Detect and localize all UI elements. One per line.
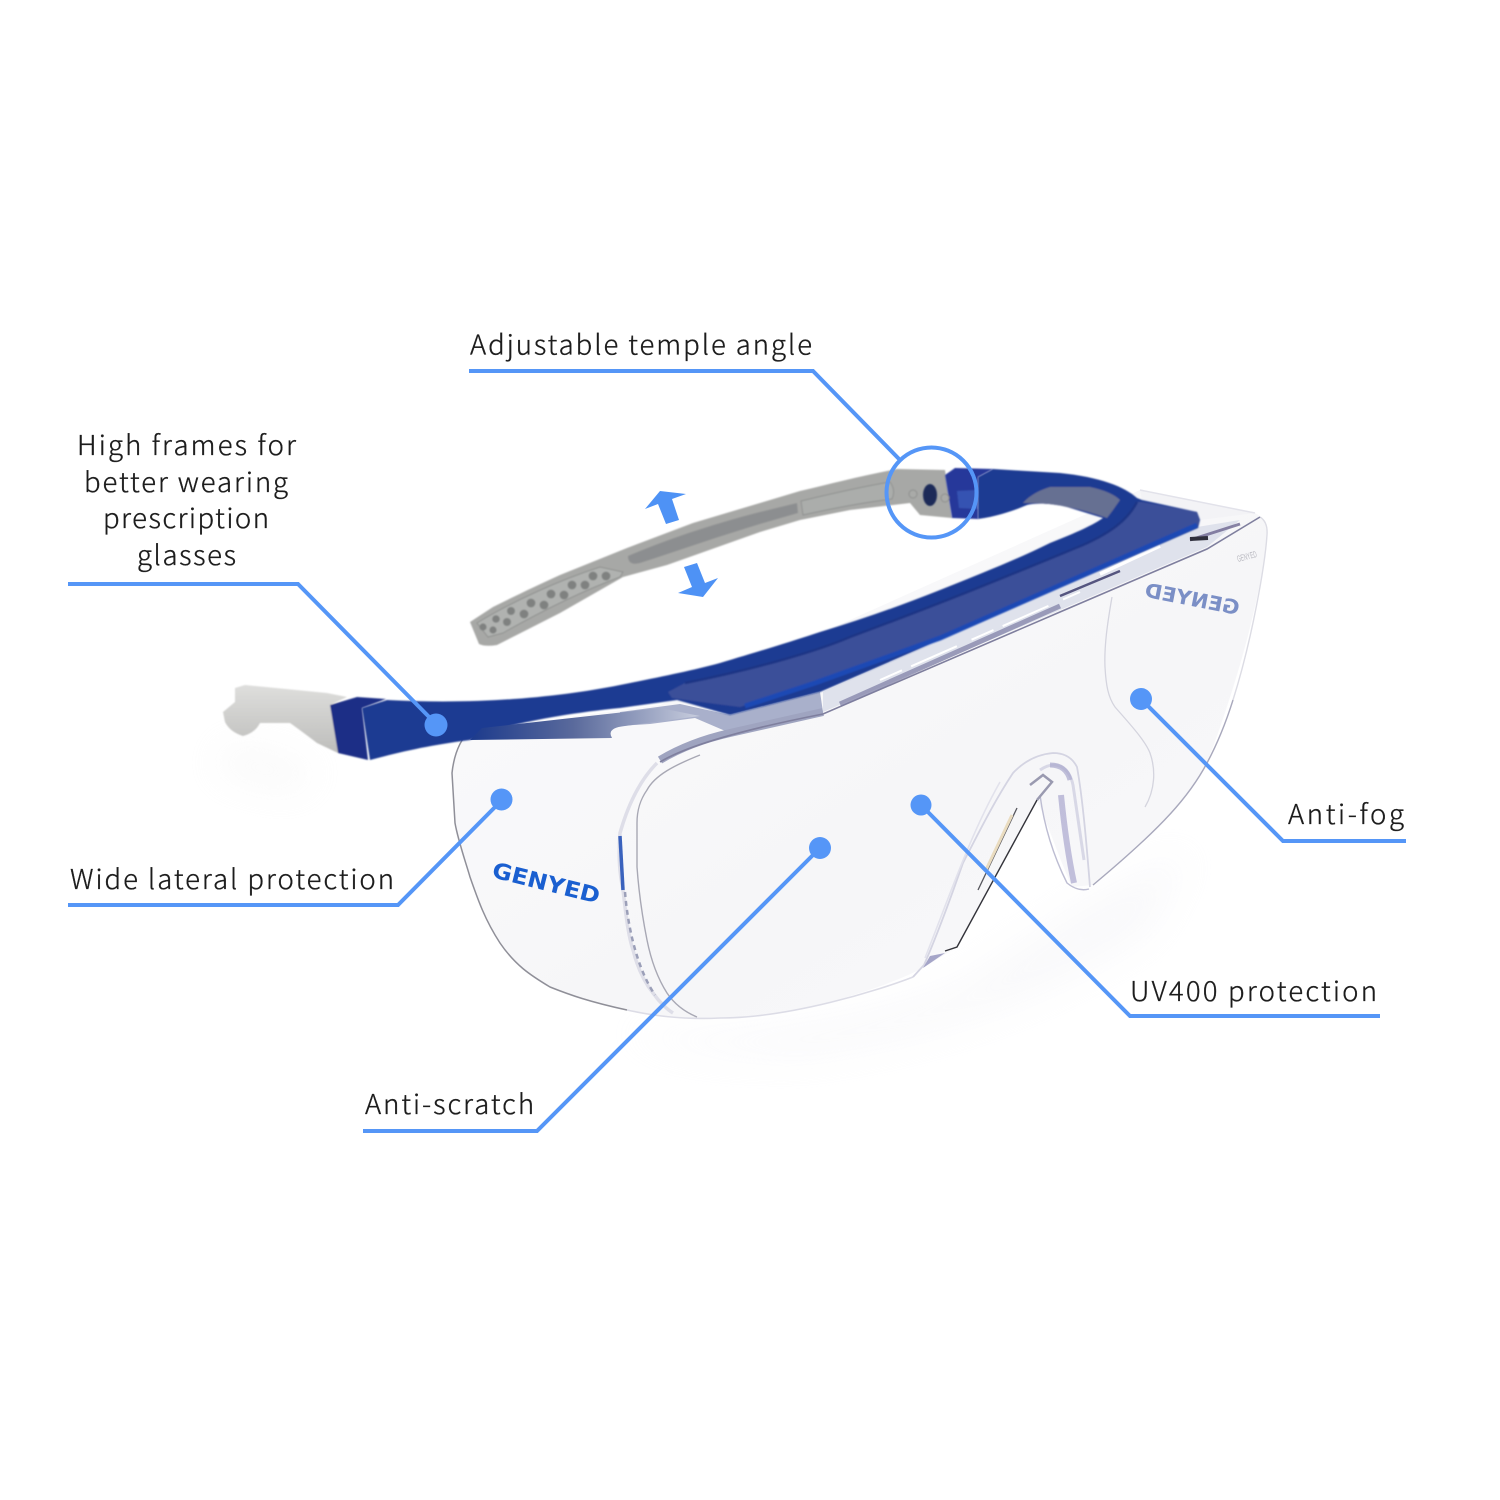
- lens top edge strip: [620, 490, 1260, 762]
- dark frame seen through lens: [470, 708, 700, 740]
- lens body: [452, 490, 1267, 1018]
- small lens marking: GENYED: [1236, 549, 1258, 564]
- callout: high frames: High frames for: [77, 423, 296, 463]
- callout: adjustable temple angle: [469, 322, 976, 538]
- callout: high frames: glasses: [137, 533, 236, 573]
- temple adjust arrows: [645, 491, 718, 597]
- callout: UV400 protection: [910, 794, 1380, 1016]
- glasses product illustration: [223, 468, 1267, 1018]
- front lens inner boundary: [637, 755, 700, 1017]
- inner grey surface: [1023, 487, 1120, 518]
- brow plate: [668, 502, 1200, 707]
- callout: anti-scratch: Anti-scratch: [365, 1082, 534, 1122]
- near temple end: [223, 685, 386, 760]
- hinge: [909, 468, 993, 519]
- callout: adjustable temple angle: Adjustable temple angle: [470, 322, 812, 362]
- callout: high frames: better wearing: [84, 460, 288, 500]
- lens divider: [1105, 597, 1154, 807]
- callout: wide lateral protection: [68, 788, 512, 905]
- callout: anti-fog: [1130, 688, 1406, 841]
- callout: wide lateral protection: Wide lateral protection: [70, 857, 394, 897]
- callout: anti-fog: Anti-fog: [1288, 792, 1404, 832]
- callout: UV400 protection: UV400 protection: [1130, 969, 1377, 1009]
- callout: high frames: prescription: [103, 496, 269, 536]
- callout: high frames: [68, 423, 448, 736]
- blue frame: [362, 469, 1200, 760]
- logo: near side: GENYED: [490, 859, 602, 909]
- far temple arm: [470, 469, 952, 646]
- logo: far side mirrored: GENYED: [1143, 578, 1242, 620]
- callout: anti-scratch: [363, 837, 831, 1131]
- nose bridge: [913, 753, 1090, 977]
- soft shadow under glasses: [215, 745, 1190, 1055]
- lens outline strokes: [452, 517, 1267, 1018]
